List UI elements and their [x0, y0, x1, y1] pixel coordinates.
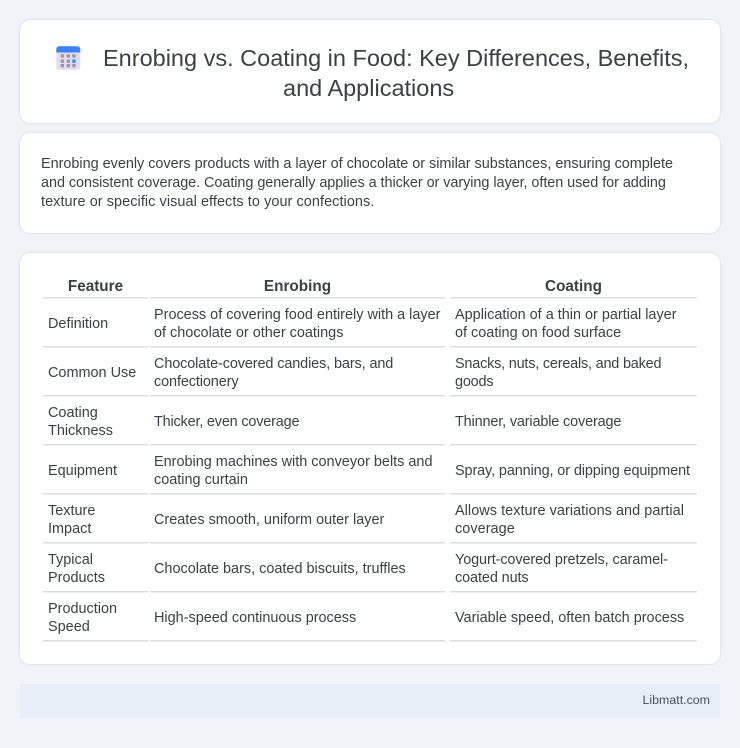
row: Production Speed: High-speed continuous process — [154, 610, 356, 626]
title: Enrobing vs. Coating in Food: Key Differences, Benefits, — [103, 45, 689, 71]
column heading: Enrobing: Enrobing — [264, 278, 331, 295]
row: Typical Products — [43, 552, 697, 593]
column heading: Feature: Feature — [68, 278, 123, 295]
row: Equipment: Equipment — [48, 462, 117, 478]
row: Typical Products: Yogurt-covered pretzels, caramel-coated nuts — [455, 552, 668, 586]
row: Production Speed: Variable speed, often batch process — [455, 610, 684, 626]
row: Typical Products: Chocolate bars, coated biscuits, truffles — [154, 560, 406, 576]
intro text: and consistent coverage. Coating generally applies a thicker or varying layer, often used for adding — [41, 175, 666, 191]
row: Definition: Definition — [48, 316, 108, 332]
row: Definition: Process of covering food entirely with a layer of chocolate or other coatings — [154, 306, 440, 340]
icon: calendar — [56, 46, 80, 70]
row: Definition — [43, 306, 697, 348]
row: Definition: of coating on food surface — [455, 324, 621, 340]
row: Texture Impact — [43, 502, 697, 544]
panel: header — [20, 20, 720, 123]
row: Texture Impact: Texture — [48, 502, 95, 518]
footer credit: Libmatt.com — [643, 693, 710, 707]
row: Texture Impact: Impact — [48, 520, 91, 536]
row: Coating Thickness: Thinner, variable coverage — [455, 414, 621, 430]
row: Equipment — [43, 454, 697, 495]
row: Equipment: Spray, panning, or dipping equipment — [455, 462, 690, 478]
column heading: Coating: Coating — [545, 278, 602, 295]
row: Equipment: Enrobing machines with conveyor belts and coating curtain — [154, 454, 432, 488]
row: Common Use: Chocolate-covered candies, bars, and confectionery — [154, 356, 393, 390]
panel: comparison table — [20, 253, 720, 664]
row: Common Use: Common Use — [48, 364, 136, 380]
row: Definition: Application of a thin or partial layer — [455, 306, 676, 322]
title — [103, 45, 689, 101]
row: Texture Impact: Creates smooth, uniform outer layer — [154, 512, 384, 528]
intro text — [41, 156, 673, 210]
panel: introduction — [20, 133, 720, 233]
title: and Applications — [283, 75, 454, 101]
footer — [20, 684, 720, 718]
row: Production Speed: Production Speed — [48, 600, 117, 634]
row: Common Use — [43, 356, 697, 397]
row: Coating Thickness: Thicker, even coverage — [154, 414, 299, 430]
row: Coating Thickness — [43, 404, 697, 446]
row: Coating Thickness: Coating Thickness — [48, 404, 113, 438]
row: Common Use: Snacks, nuts, cereals, and baked goods — [455, 356, 661, 390]
row: Production Speed — [43, 600, 697, 642]
row: Typical Products: Typical Products — [48, 552, 105, 586]
intro text: Enrobing evenly covers products with a layer of chocolate or similar substances, ensuring complete — [41, 156, 673, 172]
intro text: texture or specific visual effects to your confections. — [41, 194, 374, 210]
row: Texture Impact: Allows texture variations and partial coverage — [455, 502, 684, 536]
